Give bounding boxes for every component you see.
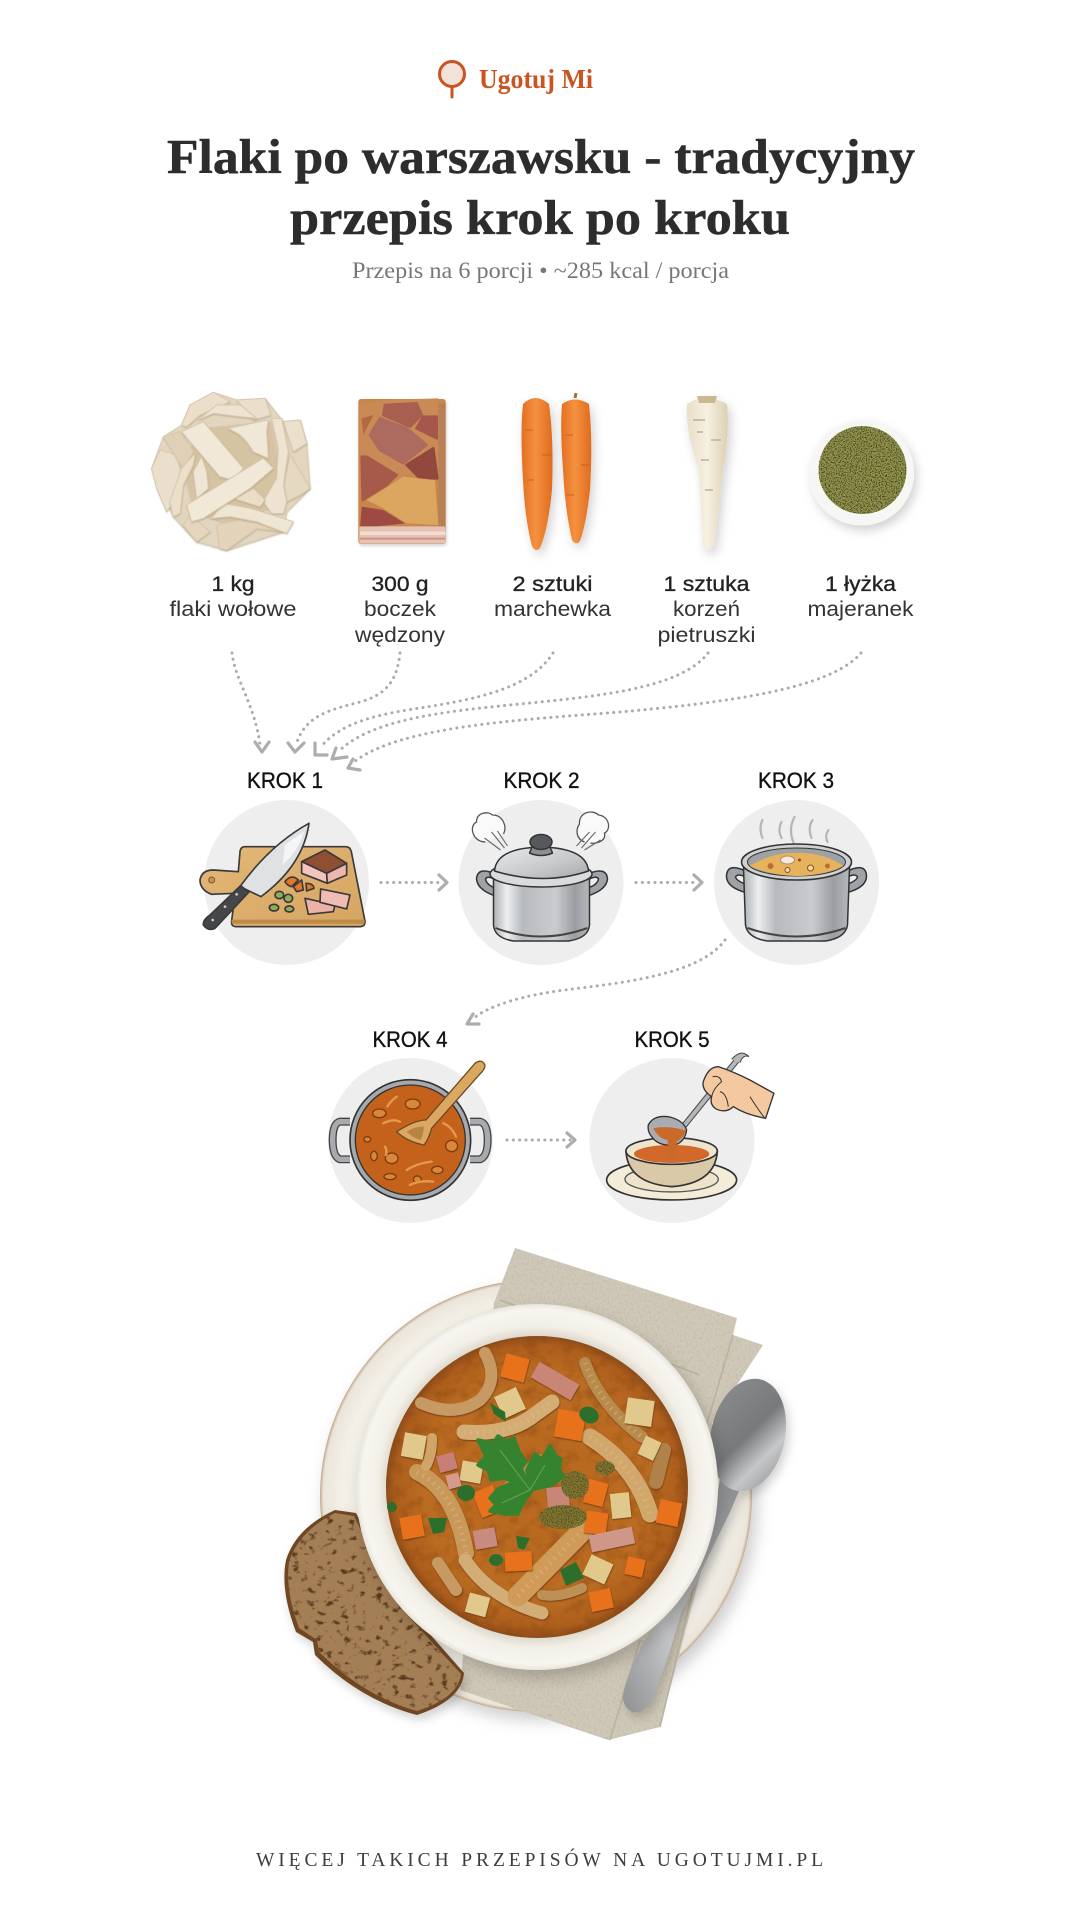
icon: tripe — [152, 392, 310, 550]
icon: parsley root — [687, 396, 728, 550]
bacon pieces — [436, 1362, 635, 1552]
label: 1 łyżka majeranek: 1 łyżka — [825, 572, 896, 596]
title: przepis krok po kroku — [290, 190, 790, 245]
plate — [320, 1280, 752, 1712]
ingredient: smoked bacon — [354, 398, 446, 647]
subtitle: Przepis na 6 porcji • ~285 kcal / porcja — [352, 258, 729, 283]
heading: KROK 5: KROK 5 — [634, 1027, 710, 1052]
logo — [440, 62, 593, 97]
step 1: chopping — [200, 768, 369, 965]
heading: KROK 2: KROK 2 — [504, 768, 580, 793]
label: 300 g boczek wędzony: 300 g — [372, 572, 428, 596]
panel: ingredients — [152, 392, 914, 647]
arrow: step 4 to step 5 — [507, 1133, 575, 1147]
heading: KROK 1: KROK 1 — [247, 768, 323, 793]
icon: pot from above with wooden spoon — [333, 1061, 488, 1200]
label: 2 sztuki marchewka: marchewka — [494, 597, 611, 621]
icon: ladle pouring soup into bowl — [607, 1053, 774, 1200]
ingredient: parsley root — [658, 396, 756, 647]
title — [167, 129, 916, 245]
arrow: step 3 to step 4 — [467, 940, 725, 1024]
arrow: step 2 to step 3 — [636, 875, 702, 890]
soup — [386, 1336, 688, 1638]
label: 1 sztuka korzeń pietruszki: pietruszki — [658, 623, 756, 647]
label: 300 g boczek wędzony — [354, 572, 445, 647]
linen napkin — [460, 1248, 763, 1740]
icon: cutting board with knife — [200, 823, 365, 929]
ingredient: marjoram — [808, 420, 914, 621]
small greens — [387, 1403, 601, 1586]
step circle — [714, 800, 879, 965]
icon: open pot with steam — [726, 817, 866, 941]
potato cubes — [401, 1387, 661, 1617]
step circle — [328, 1058, 493, 1223]
ingredient: carrots — [494, 393, 611, 621]
step 2: boiling with lid — [458, 768, 624, 965]
label: 1 kg flaki wołowe — [170, 572, 296, 621]
label: 1 sztuka korzeń pietruszki — [658, 572, 756, 647]
label: 2 sztuki marchewka: 2 sztuki — [512, 572, 592, 596]
label: 1 sztuka korzeń pietruszki: 1 sztuka — [664, 572, 750, 596]
arrows: ingredients to step 1 — [232, 653, 861, 770]
icon: ladle logo — [440, 62, 464, 97]
finished dish photo — [284, 1248, 796, 1740]
icon: pot with lid and steam — [472, 812, 609, 941]
label: 1 łyżka majeranek — [808, 572, 914, 621]
label: 1 kg flaki wołowe: flaki wołowe — [170, 597, 296, 621]
title: Flaki po warszawsku - tradycyjny — [167, 129, 916, 184]
footer: WIĘCEJ TAKICH PRZEPISÓW NA UGOTUJMI.PL — [256, 1849, 823, 1871]
heading: KROK 4: KROK 4 — [372, 1027, 448, 1052]
label: 300 g boczek wędzony: boczek — [364, 597, 436, 621]
icon: two carrots — [522, 393, 591, 550]
step 3: simmering — [714, 768, 879, 965]
step circle — [458, 800, 624, 965]
step 5: serving — [590, 1027, 774, 1223]
step circle — [590, 1058, 754, 1223]
icon: bacon slab — [358, 398, 446, 544]
label: 300 g boczek wędzony: wędzony — [354, 623, 445, 647]
label: 2 sztuki marchewka — [494, 572, 611, 621]
step circle — [204, 800, 369, 965]
tripe strips — [417, 1353, 664, 1613]
label: 1 łyżka majeranek: majeranek — [808, 597, 914, 621]
strip ridges — [417, 1363, 650, 1596]
arrow: step 1 to step 2 — [381, 875, 447, 890]
bread slice — [284, 1510, 464, 1715]
parsley garnish — [478, 1436, 564, 1514]
step 4: stirring — [328, 1027, 493, 1223]
carrot cubes — [399, 1353, 682, 1612]
label: 1 kg flaki wołowe: 1 kg — [212, 572, 254, 596]
soup bowl — [356, 1304, 718, 1670]
brand name: Ugotuj Mi — [479, 64, 593, 94]
label: 1 sztuka korzeń pietruszki: korzeń — [673, 597, 740, 621]
ingredient: beef tripe — [152, 392, 310, 621]
icon: bowl of marjoram — [809, 420, 914, 526]
heading: KROK 3: KROK 3 — [758, 768, 834, 793]
herbs sprinkle — [539, 1461, 615, 1529]
spoon — [623, 1372, 796, 1712]
